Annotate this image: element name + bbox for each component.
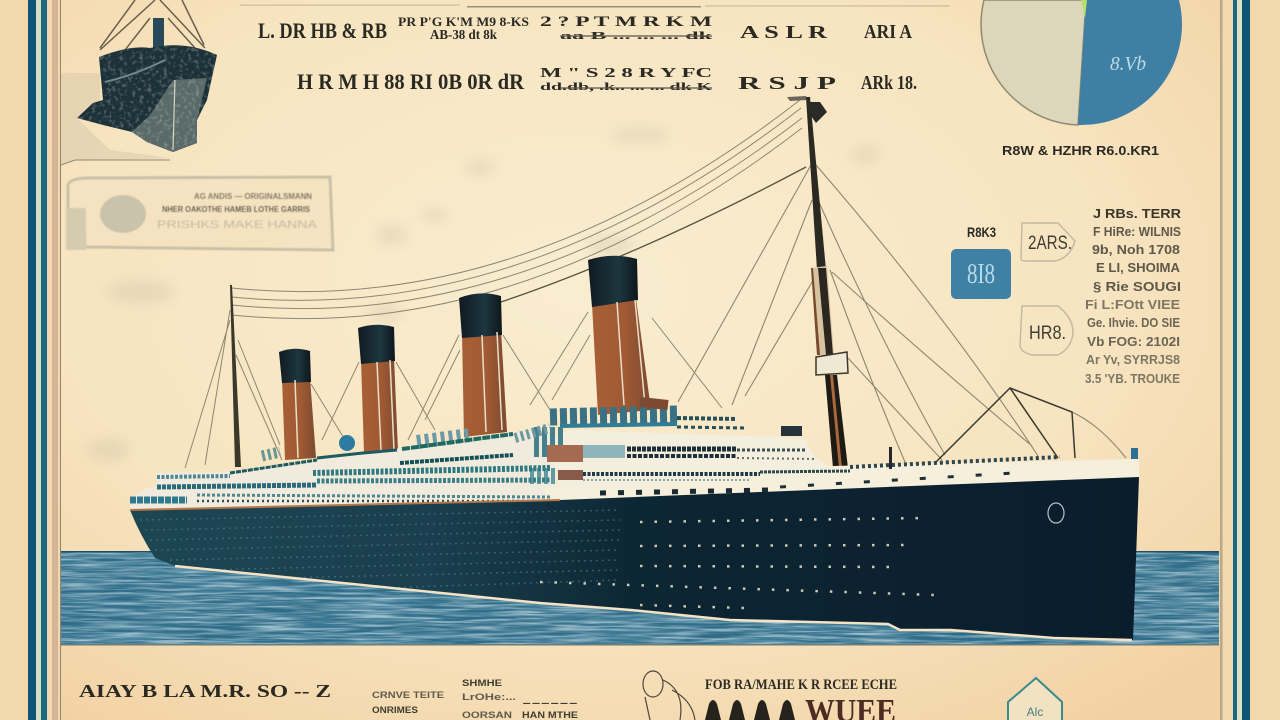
row two: M " S 2 8 R Y FC	[540, 66, 712, 81]
signal post	[889, 447, 892, 469]
pie chart	[981, 0, 1182, 125]
stat card: blue: 8I8	[967, 259, 995, 290]
row one: ARI A	[864, 21, 912, 43]
sketch funnel	[153, 18, 164, 52]
top cut-off rules	[240, 5, 950, 7]
specification list: Ar Yv, SYRRJS8	[1086, 352, 1180, 367]
bridge wing	[781, 426, 802, 436]
sketch mottling	[77, 40, 219, 154]
note text	[157, 192, 318, 231]
stat label: R8K3	[967, 224, 996, 240]
lifeboat blue	[339, 435, 355, 451]
specification list: Ge. Ihvie. DO SIE	[1087, 315, 1180, 330]
note circle	[100, 195, 146, 233]
sketch hull	[77, 45, 217, 152]
note frame	[68, 177, 333, 250]
stat tag one	[1021, 223, 1075, 261]
sketch bow	[132, 78, 207, 152]
row one: L. DR HB & RB	[258, 18, 387, 43]
sea band	[61, 551, 1219, 646]
bottom strip middle notes	[372, 678, 578, 720]
bow emblem	[1048, 503, 1064, 523]
row two: R S J P	[738, 73, 836, 93]
row two: dd.db, .k.. ... ... dk K	[540, 81, 713, 93]
row one	[258, 14, 912, 43]
bottom strip heading: FOB RA/MAHE K R RCEE ECHE	[705, 677, 897, 693]
right border stripes	[1220, 0, 1250, 720]
forward block	[550, 430, 832, 492]
deck window rows	[130, 434, 1060, 501]
lower mast	[825, 375, 848, 468]
funnels	[279, 256, 651, 460]
masthead flag	[808, 102, 827, 123]
stat card: blue	[951, 249, 1011, 299]
row two: H R M H 88 RI 0B 0R dR	[297, 69, 525, 94]
funnel 1	[279, 349, 316, 460]
forward windows	[627, 446, 737, 452]
specification list: 9b, Noh 1708	[1092, 242, 1180, 257]
row one: aa B ... ... ... dk	[560, 31, 713, 42]
bow deck	[545, 459, 1139, 505]
sketch paper	[61, 73, 170, 165]
row one: 2 ? P T M R K M	[540, 14, 712, 30]
funnel 2	[358, 325, 398, 453]
aft mast stays	[185, 310, 282, 468]
stat tag two: HR8.	[1029, 323, 1066, 344]
specification list: Vb FOG: 2102I	[1087, 334, 1180, 349]
boot stripe	[130, 500, 560, 510]
upper mast	[806, 97, 826, 270]
pie green sliver	[1081, 0, 1087, 18]
row two: ARk 18.	[861, 72, 917, 94]
row one: PR P'G K'M M9 8-KS	[398, 14, 529, 29]
bottom strip middle notes: CRNVE TEITE	[372, 690, 444, 700]
bottom strip middle notes: OORSAN	[462, 710, 512, 720]
funnel 4	[588, 256, 651, 415]
hull portholes	[540, 518, 935, 608]
sea highlights	[61, 552, 1219, 645]
people pictogram row	[705, 700, 795, 720]
specification list: E LI, SHOIMA	[1096, 260, 1181, 275]
superstructure	[130, 402, 1139, 510]
red deckhouse	[547, 445, 583, 462]
row two	[297, 66, 917, 94]
faint smudges	[86, 127, 879, 461]
waterline foam	[175, 566, 1132, 640]
upper clutter behind funnels	[262, 402, 745, 476]
crow's nest	[816, 352, 848, 375]
hull	[130, 477, 1139, 640]
aft mast	[230, 285, 241, 467]
underlines	[560, 36, 712, 88]
specification list: J RBs. TERR	[1093, 206, 1182, 221]
hexagon badge	[1008, 678, 1062, 720]
bottom strip figure sketch	[643, 671, 695, 720]
funnel 3	[459, 293, 507, 437]
funnel stays	[311, 312, 722, 440]
ship rigging	[185, 100, 1126, 468]
specification list: F HiRe: WILNIS	[1093, 224, 1181, 239]
sketch rigging	[100, 0, 205, 50]
pie value label: 8.Vb	[1110, 53, 1146, 75]
row one: A S L R	[740, 22, 828, 42]
long aerial stays	[232, 100, 800, 292]
hexagon badge: Alc	[1027, 705, 1043, 719]
hull body	[130, 477, 1139, 640]
bottom strip left text: AIAY B LA M.R. SO -- Z	[79, 681, 331, 701]
pie neutral slice	[981, 0, 1086, 125]
note text: AG ANDIS — ORIGINALSMANN	[194, 192, 312, 201]
note text: NHER OAKOTHE HAMEB LOTHE GARRIS	[162, 204, 310, 214]
glazed section	[583, 445, 625, 458]
specification list	[1085, 206, 1182, 386]
left border stripes	[28, 0, 62, 720]
row one: AB-38 dt 8k	[430, 28, 497, 43]
foremast	[787, 96, 848, 468]
pie blue slice	[1078, 0, 1182, 125]
stat tag two	[1020, 306, 1073, 355]
pie caption: R8W & HZHR R6.0.KR1	[1002, 143, 1159, 158]
bottom strip middle notes: HAN MTHE	[522, 710, 578, 720]
bow light	[1131, 448, 1138, 459]
masthead yard	[787, 96, 807, 101]
aft white decks	[130, 425, 560, 510]
sea dark waves	[61, 552, 1219, 645]
stat tag one: 2ARS.	[1028, 233, 1072, 254]
bottom strip middle notes: LrOHe:...	[462, 692, 516, 702]
bottom strip middle notes: SHMHE	[462, 678, 502, 688]
mast sleeve	[811, 266, 834, 355]
specification list: 3.5 'YB. TROUKE	[1085, 371, 1180, 386]
sea base	[61, 552, 1219, 645]
specification list: Fi L:FOtt VIEE	[1085, 297, 1180, 312]
derrick	[935, 388, 1075, 463]
note box	[66, 177, 333, 250]
foremast stays	[678, 165, 1126, 462]
specification list: § Rie SOUGI	[1093, 279, 1181, 294]
vignette: small ship sketch	[61, 0, 219, 165]
bottom strip middle notes: ------	[522, 698, 578, 708]
header text rows	[258, 14, 917, 94]
bottom strip middle notes: ONRIMES	[372, 705, 418, 715]
note text: PRISHKS MAKE HANNA	[157, 219, 318, 231]
hull rivet texture	[140, 510, 620, 588]
